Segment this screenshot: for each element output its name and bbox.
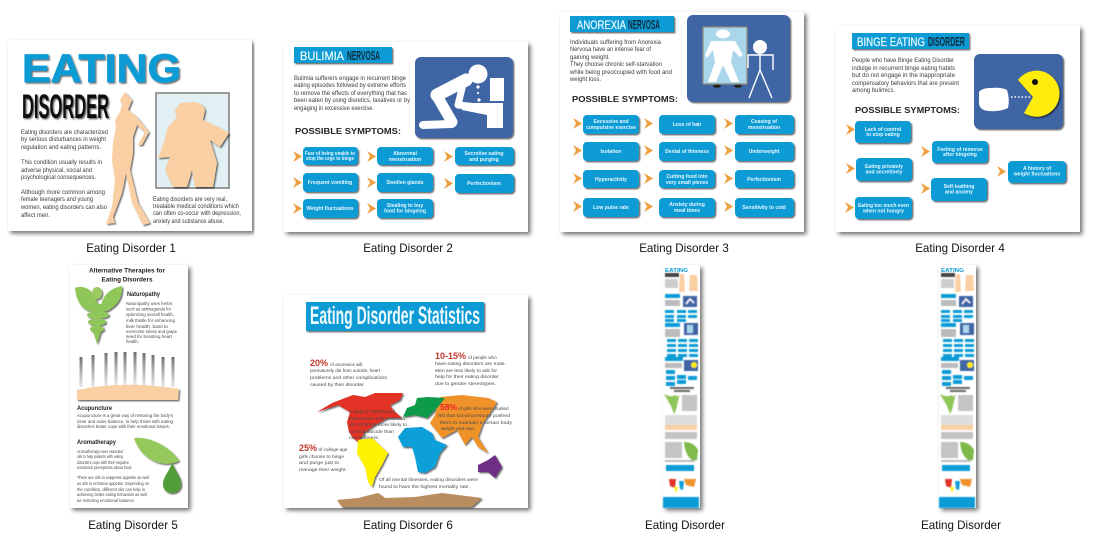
header: Bulimia Nervosa	[294, 47, 392, 63]
symptom: underweight: Underweight	[749, 149, 780, 155]
icon: pac-man eating food	[974, 54, 1063, 129]
description text: They choose chronic self-starvation	[570, 61, 663, 68]
panel: Eating Disorder 1: DISORDER	[22, 88, 109, 126]
icon: green leaf with oil drop	[134, 438, 181, 493]
icon: caduceus of leaves	[75, 286, 122, 344]
symptom: loss of hair	[644, 115, 715, 134]
description text: eating episodes followed by extreme efforts	[294, 82, 406, 89]
symptom: perfectionism: Perfectionism	[747, 177, 781, 183]
symptom: excessive compulsive exercise: compulsive exercise	[586, 125, 636, 131]
symptom: cutting food into small pieces: very small pieces	[666, 180, 708, 186]
aromatherapy text: disorders cope with their negative	[77, 460, 129, 465]
intro text: female teenagers and young	[21, 196, 94, 203]
illustration: acupuncture needles in skin	[77, 352, 179, 400]
symptom: fear of being unable to stop: stop the urge to binge	[306, 156, 354, 162]
caption: Eating Disorder duplicate: Eating Disorder	[921, 519, 1001, 532]
panel: Eating Disorder 4 binge eating	[836, 26, 1080, 232]
naturopathy text: overcome stress and grape	[126, 329, 177, 334]
symptom: low pulse rate: Low pulse rate	[593, 205, 629, 211]
description text	[569, 39, 673, 83]
stat: anorexia suicide study: A study in 2003 found	[349, 409, 395, 414]
intro text: affect men.	[21, 212, 50, 219]
aromatherapy text: the condition, different oils can help in	[77, 487, 145, 492]
symptom: isolation	[573, 142, 639, 161]
header: Anorexia Nervosa: ANOREXIA	[577, 18, 626, 32]
aromatherapy text	[77, 449, 149, 503]
symptom: self-loathing	[921, 178, 987, 201]
heading: alternative therapies: Alternative Therapies for	[89, 268, 166, 274]
closing text: Eating disorders are very real,	[153, 196, 227, 203]
heading: possible symptoms: POSSIBLE SYMPTOMS:	[855, 105, 960, 115]
intro text: by serious disturbances in weight	[21, 136, 106, 143]
description text: among bulimics.	[852, 87, 895, 94]
description text: weight loss.	[569, 76, 601, 83]
icon: thin figure seeing large reflection in mirror	[687, 15, 790, 102]
description text	[852, 57, 959, 94]
heading: alternative therapies: Eating Disorders	[102, 278, 153, 284]
intro text: Although more common among	[21, 189, 106, 196]
heading: aromatherapy: Aromatherapy	[77, 440, 117, 446]
naturopathy text: seed for boosting heart	[126, 334, 173, 339]
symptom: weight fluctuations	[293, 199, 358, 218]
stat: 58 percent: 58%of girls who were studied	[440, 402, 509, 412]
symptom: abnormal menstruation	[367, 147, 433, 165]
naturopathy text: health.	[126, 339, 139, 344]
symptom: weight fluctuations: Weight fluctuations	[306, 206, 354, 212]
stat: 25 percent	[299, 443, 348, 472]
symptom: excessive compulsive exercise	[573, 115, 639, 134]
panel: Eating Disorder 1	[8, 40, 252, 231]
symptom: fear of being unable to stop	[293, 147, 358, 165]
aromatherapy text: oils to help patients with eating	[77, 454, 123, 459]
panel: Eating Disorder 6 statistics	[284, 295, 528, 508]
naturopathy text: liver health, basil to	[126, 324, 168, 329]
aromatherapy text: There are oils to suppress appetite as well	[77, 475, 149, 480]
stat: 20 percent: problems and other complications	[310, 375, 388, 380]
caption: Eating Disorder 2: Eating Disorder 2	[363, 242, 453, 255]
symptom: hyperactivity	[573, 170, 639, 188]
aromatherapy text: as oils to enhance appetite. Depending on	[77, 481, 149, 486]
panel: duplicate long infographic thumbnail	[939, 265, 976, 508]
symptom: frequent vomiting: Frequent vomiting	[308, 180, 352, 186]
symptom: sensitivity to cold	[724, 198, 794, 217]
intro text	[20, 129, 109, 219]
header: Anorexia Nervosa: NERVOSA	[628, 17, 660, 32]
stat: 25 percent: manage their weight.	[299, 467, 347, 472]
stat: 10-15 percent: Men are less likely to ask for	[435, 368, 497, 373]
heading: alternative therapies	[89, 268, 166, 284]
symptom: underweight	[724, 142, 794, 161]
description text: People who have Binge Eating Disorder	[852, 57, 954, 64]
symptom: stealing to buy food: food for bingeing	[384, 208, 426, 214]
intro text: This condition usually results in	[21, 159, 103, 166]
description text: Individuals suffering from Anorexia	[570, 39, 662, 46]
stat: 25 percent: 25% of college-age	[299, 443, 348, 453]
stat: 25 percent: girls choose to binge	[299, 454, 344, 459]
panel: Eating Disorder 3 anorexia	[560, 12, 804, 232]
intro text: women, eating disorders can also	[20, 204, 108, 211]
header: Binge Eating Disorder: BINGE EATING	[857, 35, 925, 49]
symptom: isolation: Isolation	[601, 149, 621, 155]
header: Eating Disorder Statistics: Eating Disorder Statistics	[310, 302, 480, 330]
title: Eating: EATING	[22, 47, 181, 91]
symptom: swollen glands	[367, 173, 433, 192]
symptom: eating privately	[846, 158, 912, 181]
stat: 58 percent: felt that social pressure pushed	[438, 413, 510, 418]
symptom: perfectionism: Perfectionism	[467, 181, 501, 187]
intro text: Eating disorders are characterized	[21, 129, 109, 136]
symptom: hyperactivity: Hyperactivity	[595, 177, 627, 183]
mini page contents	[939, 273, 975, 508]
description text: been eaten by using diuretics, laxatives or by	[294, 97, 411, 104]
symptom: abnormal menstruation: Abnormal	[393, 151, 417, 157]
closing text: can often co-occur with depression,	[153, 210, 241, 217]
aromatherapy text: achieving better eating behaviors as well	[77, 492, 147, 497]
stat: 20 percent	[310, 358, 388, 387]
symptom: sensitivity to cold: Sensitivity to cold	[742, 205, 786, 211]
stat: anorexia suicide study: commit suicide than	[349, 429, 394, 434]
symptom: loss of hair: Loss of hair	[673, 122, 701, 128]
symptom: feeling of remorse: Feeling of remorse	[937, 147, 983, 153]
symptom: swollen glands: Swollen glands	[386, 180, 424, 186]
intro text: regulation and eating patterns.	[21, 144, 101, 151]
stat: 10-15 percent: 10-15% of people who	[435, 351, 497, 361]
description text: Nervosa have an intense fear of	[570, 46, 651, 53]
header: Binge Eating Disorder: DISORDER	[928, 34, 965, 49]
symptom: weight fluctuation history	[997, 161, 1066, 183]
description text: indulge in recurrent binge eating habits	[852, 65, 955, 72]
stat: 20 percent: prematurely die from suicide, heart	[310, 368, 381, 373]
stat: 10-15 percent: have eating disorders are male.	[435, 361, 506, 366]
panel: Eating Disorder 2 bulimia	[284, 42, 528, 232]
stat: 20 percent: 20% of anorexics will	[310, 358, 362, 368]
mini page contents	[663, 273, 699, 508]
symptom: ceasing of menstruation: menstruation	[748, 125, 780, 131]
acupuncture text: inner and outer balance, to help those with eating	[77, 419, 173, 424]
heading: acupuncture: Acupuncture	[77, 406, 113, 412]
stat: anorexia suicide study: are 18 times more likely to	[349, 422, 407, 427]
symptom: anxiety during meal times: Anxiety during	[669, 202, 705, 208]
frame with overweight silhouette	[156, 93, 229, 188]
stat: 10-15 percent: help for their eating disorder	[435, 374, 500, 379]
stat: anorexia suicide study: that women with anorexia	[349, 416, 405, 421]
stat: anorexia suicide study: non-sufferers.	[349, 435, 379, 440]
description text: while being preoccupied with food and	[569, 69, 673, 76]
header: Eating Disorder Statistics	[306, 302, 484, 331]
symptom: feeling of remorse	[921, 141, 988, 163]
naturopathy text: optimizing overall health,	[126, 312, 174, 317]
stat: 25 percent: and purge just to	[299, 460, 340, 465]
description text: gaining weight.	[570, 54, 610, 61]
symptom: self-loathing: Self-loathing	[944, 184, 974, 190]
symptom: lack of control: Lack of control	[865, 127, 902, 133]
mini title: EATING	[665, 268, 688, 274]
symptom: cutting food into small pieces	[644, 170, 715, 188]
symptom: ceasing of menstruation	[724, 115, 794, 134]
symptom: stealing to buy food: Stealing to buy	[387, 203, 423, 209]
acupuncture text: disorders better cope with their emotional issues.	[77, 424, 170, 429]
figure: slim woman silhouette	[106, 92, 150, 225]
stat: 58 percent: weight and size.	[441, 426, 475, 431]
symptom: excessive compulsive exercise: Excessive and	[593, 119, 629, 125]
symptom: fear of being unable to stop: Fear of being unable to	[305, 151, 355, 157]
world map	[317, 393, 502, 507]
caption: Eating Disorder 6: Eating Disorder 6	[363, 519, 453, 532]
symptom: low pulse rate	[573, 198, 639, 217]
stat: 10-15 percent	[435, 351, 506, 386]
stat: highest mortality: found to have the highest mortality rate.	[379, 484, 470, 489]
heading: possible symptoms: POSSIBLE SYMPTOMS:	[572, 94, 678, 104]
stat: 10-15 percent: due to gender stereotypes.	[435, 381, 496, 386]
panel: combined long infographic thumbnail	[663, 265, 700, 508]
symptom: weight fluctuation history: weight fluctuations	[1013, 172, 1060, 178]
symptom: eating privately: Eating privately	[865, 164, 903, 170]
intro text: adverse physical, social and	[21, 167, 93, 174]
naturopathy text	[126, 301, 177, 344]
intro text: psychological consequences.	[21, 174, 96, 181]
symptom: secretive eating and purging	[444, 147, 514, 165]
heading: possible symptoms: POSSIBLE SYMPTOMS:	[295, 126, 401, 136]
caption: Eating Disorder 3: Eating Disorder 3	[639, 242, 729, 255]
description text: to remove the effects of everything that has	[294, 90, 407, 97]
symptom: eating too much	[845, 197, 912, 219]
symptom: abnormal menstruation: menstruation	[389, 157, 421, 163]
panel: Eating Disorder 5 alternative therapies	[70, 265, 188, 508]
symptom: perfectionism	[444, 174, 514, 193]
naturopathy text: Naturopathy uses herbs	[126, 301, 173, 306]
description text: Bulimia sufferers engage in recurrent binge	[294, 75, 407, 82]
symptom: ceasing of menstruation: Ceasing of	[751, 119, 777, 125]
stat: 58 percent: them to maintain a certain body	[440, 420, 513, 425]
header: Anorexia Nervosa	[570, 16, 674, 32]
naturopathy text: such as ashwaganda for	[126, 306, 171, 312]
symptom: anxiety during meal times	[644, 198, 715, 217]
symptom: lack of control: to stop eating	[866, 132, 900, 138]
symptom: eating too much: when not hungry	[862, 208, 904, 214]
acupuncture text	[77, 413, 174, 429]
acupuncture text: Acupuncture is a great way of restoring the body's	[77, 413, 174, 418]
symptom: denial of thinness	[644, 142, 715, 161]
header: Bulimia Nervosa: BULIMIA	[300, 49, 344, 63]
symptom: frequent vomiting	[293, 173, 358, 192]
header: Bulimia Nervosa: NERVOSA	[347, 48, 380, 63]
closing text	[153, 196, 241, 225]
symptom: eating too much: Eating too much even	[858, 203, 909, 209]
symptom: secretive eating and purging: and purging	[469, 157, 499, 163]
description text: compensatory behaviors that are present	[852, 80, 959, 87]
symptom: secretive eating and purging: Secretive eating	[464, 151, 504, 157]
icon: person vomiting over toilet	[415, 57, 513, 138]
stat: 58 percent	[438, 402, 513, 431]
symptom: weight fluctuation history: A history of	[1023, 166, 1051, 172]
symptom: anxiety during meal times: meal times	[674, 208, 700, 214]
aromatherapy text: emotional perceptions about food.	[77, 465, 132, 470]
stat: highest mortality	[379, 477, 478, 489]
mini title: EATING	[941, 268, 964, 274]
closing text: anxiety and substance abuse.	[153, 218, 224, 225]
symptom: eating privately: and secretively	[866, 170, 903, 176]
symptom: cutting food into small pieces: Cutting food into	[666, 174, 708, 180]
symptom: denial of thinness: Denial of thinness	[665, 149, 709, 155]
symptom: feeling of remorse: after bingeing	[943, 152, 977, 158]
caption: Eating Disorder 5: Eating Disorder 5	[88, 519, 178, 532]
closing text: treatable medical conditions which	[153, 203, 239, 210]
aromatherapy text: as restoring emotional balance.	[77, 498, 135, 503]
stat: anorexia suicide study	[349, 409, 407, 440]
symptom: perfectionism	[724, 170, 794, 188]
stat: 20 percent: caused by their disorder.	[310, 382, 365, 387]
caption: Eating Disorder: Eating Disorder	[645, 519, 725, 532]
header: Binge Eating Disorder	[852, 33, 969, 49]
caption: Eating Disorder 1: Eating Disorder 1	[86, 242, 176, 255]
symptom: self-loathing: and anxiety	[945, 190, 973, 196]
symptom: lack of control	[846, 121, 911, 143]
description text	[294, 75, 411, 112]
heading: naturopathy: Naturopathy	[127, 292, 161, 298]
description text: but do not engage in the inappropriate	[852, 72, 956, 79]
naturopathy text: milk thistle for enhancing	[126, 318, 175, 323]
stat: highest mortality: Of all mental illnesses, eating disorders were	[379, 477, 478, 482]
aromatherapy text: Aromatherapy uses essential	[77, 449, 123, 454]
symptom: stealing to buy food	[367, 199, 433, 218]
description text: engaging in excessive exercise.	[294, 105, 374, 112]
caption: Eating Disorder 4: Eating Disorder 4	[915, 242, 1005, 255]
